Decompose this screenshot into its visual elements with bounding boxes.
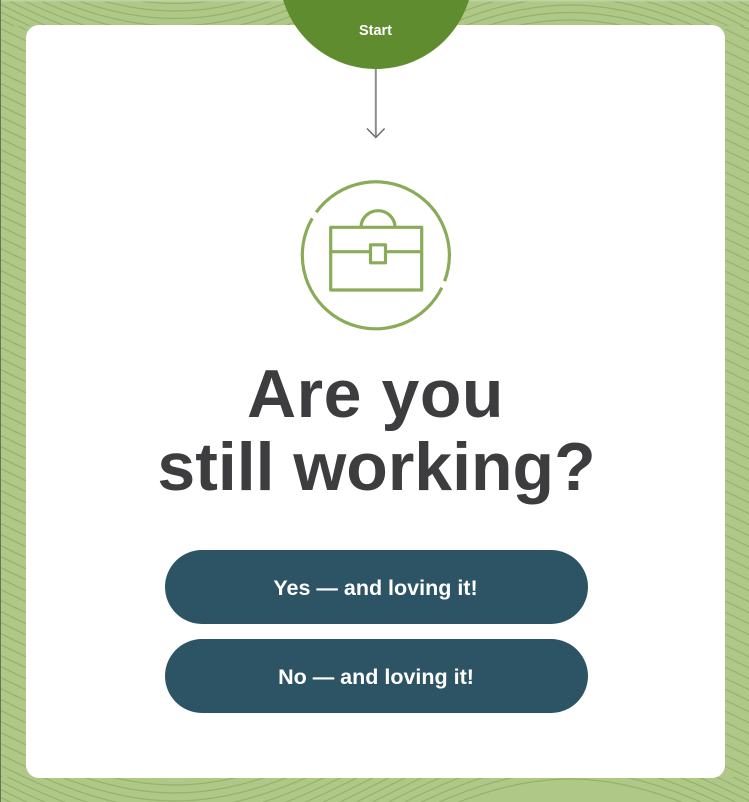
start circle: [279, 0, 473, 69]
title: [157, 356, 596, 505]
button: no: [165, 639, 588, 713]
arrow: start to question: [366, 69, 385, 138]
title: still working?: [157, 429, 596, 505]
button: no: No — and loving it!: [278, 665, 474, 689]
icon: briefcase in ring: [300, 180, 451, 330]
start label: Start: [359, 22, 392, 38]
button: yes: [165, 550, 588, 624]
title: Are you: [247, 356, 504, 432]
button: yes: Yes — and loving it!: [273, 576, 478, 600]
